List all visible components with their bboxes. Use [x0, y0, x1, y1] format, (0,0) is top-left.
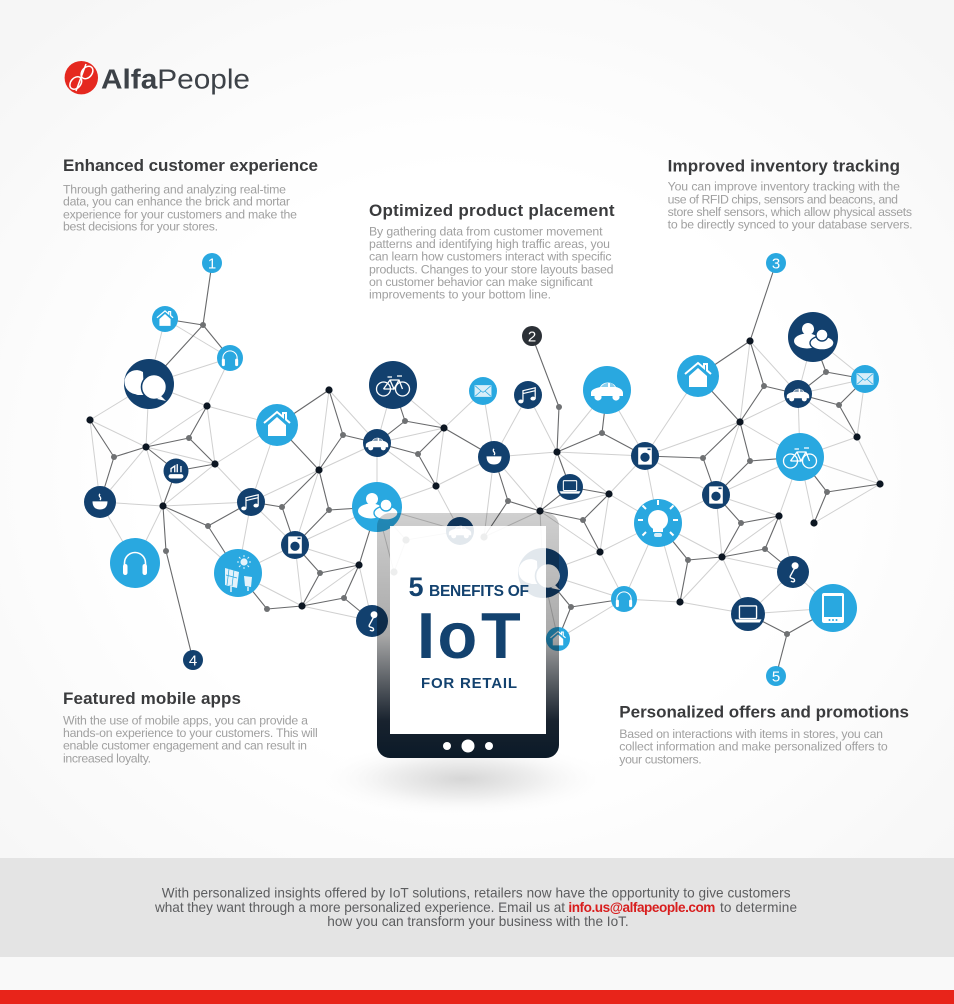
text block: Improved inventory tracking: You can improve inventory tracking with the [668, 180, 900, 194]
text block: Personalized offers and promotions: collect information and make personalized offers to [619, 740, 888, 754]
tablet device [377, 513, 559, 758]
logo: AlfaPeople: AlfaPeople [101, 63, 250, 94]
marker 4: 4 [189, 652, 197, 670]
icon: people left [352, 482, 402, 532]
icon: people dark [788, 312, 838, 362]
text block: Enhanced customer experience: best decisions for your stores. [63, 220, 218, 234]
icon: coffee left [84, 486, 116, 518]
text block: Personalized offers and promotions: Based on interactions with items in stores, you can [619, 727, 883, 741]
tablet title: 5 benefits of IoT for retail: BENEFITS OF [429, 583, 529, 600]
icon: chat bubbles [124, 359, 174, 409]
tablet frame [377, 513, 559, 758]
text block: Featured mobile apps [63, 689, 318, 765]
text block: Optimized product placement: improvements to your bottom line. [369, 288, 551, 302]
icon: factory chart [164, 458, 188, 484]
text block: Featured mobile apps: hands-on experience to your customers. This will [63, 726, 318, 740]
icon: laptop large [731, 597, 765, 631]
text block: Optimized product placement: By gathering data from customer movement [369, 224, 603, 238]
icon: music centre [514, 381, 542, 409]
marker 2 [522, 326, 542, 346]
network: dark connection lines [90, 263, 880, 676]
text block: Improved inventory tracking: use of RFID chips, sensors and beacons, and [668, 192, 898, 206]
marker 1 [202, 253, 222, 273]
icon: car large [583, 366, 631, 414]
icon: washer centre [631, 442, 659, 470]
icon: email right [851, 365, 879, 393]
closing band: to determine [720, 900, 797, 915]
icon: car small right [784, 380, 812, 408]
closing band: how you can transform your business with the IoT. [327, 914, 629, 929]
marker 2: 2 [528, 328, 536, 346]
marker 3: 3 [772, 256, 780, 272]
tablet title: 5 benefits of IoT for retail: FOR RETAIL [421, 675, 517, 692]
text block: Enhanced customer experience: Through gathering and analyzing real-time [63, 182, 286, 196]
icon: washer right [702, 481, 730, 509]
icon: solar panels [214, 549, 262, 597]
marker 5: 5 [772, 668, 780, 686]
tablet title: 5 benefits of IoT for retail [408, 572, 529, 692]
red footer bar [0, 990, 954, 1004]
tablet title: 5 benefits of IoT for retail: 5 [408, 572, 424, 602]
text block: Personalized offers and promotions: your customers. [619, 752, 702, 766]
icon: headphones large [110, 538, 160, 588]
marker 5 [766, 666, 786, 686]
icon: home large [256, 404, 298, 446]
icon: bicycle dark [369, 361, 417, 409]
text block: Improved inventory tracking: store shelf sensors, which allow physical assets [668, 205, 912, 219]
text block: Optimized product placement: products. Changes to your store layouts based [369, 262, 614, 276]
marker 4 [183, 650, 203, 670]
icon: microphone left [356, 605, 388, 637]
tablet screen [390, 526, 546, 734]
icon: email centre [469, 377, 497, 405]
tablet title: 5 benefits of IoT for retail: IoT [417, 599, 521, 672]
network: light connection lines [90, 319, 880, 639]
text block: Enhanced customer experience: Enhanced customer experience [63, 156, 318, 175]
network: junction nodes [86, 322, 884, 637]
icon: music left [237, 488, 265, 516]
marker 3 [766, 253, 786, 273]
text block: Featured mobile apps: enable customer engagement and can result in [63, 739, 307, 753]
closing band [0, 858, 954, 957]
icon: car small centre left [363, 429, 391, 457]
icon: laptop small [557, 474, 583, 500]
icon: home small tablet edge [546, 627, 570, 651]
text block: Improved inventory tracking [668, 156, 913, 232]
text block: Featured mobile apps: With the use of mobile apps, you can provide a [63, 713, 308, 727]
icon: bicycle light [776, 433, 824, 481]
text block: Enhanced customer experience [63, 156, 318, 234]
icon: coffee centre [478, 441, 510, 473]
icon: tablet [809, 584, 857, 632]
text block: Optimized product placement: patterns and identifying high traffic areas, you [369, 237, 610, 251]
icon: headphones small left [217, 345, 243, 371]
text block: Personalized offers and promotions: Personalized offers and promotions [619, 703, 909, 722]
text block: Improved inventory tracking: Improved inventory tracking [668, 156, 900, 176]
tablet ground shadow [313, 741, 613, 817]
text block: Optimized product placement: can learn how customers interact with specific [369, 250, 612, 264]
text block: Optimized product placement [369, 201, 615, 302]
icon: washer left [281, 531, 309, 559]
icon: light bulb [634, 499, 682, 547]
icon: home small left [152, 306, 178, 332]
icon: home right [677, 355, 719, 397]
text block: Improved inventory tracking: to be directly synced to your database servers. [668, 218, 913, 232]
tablet buttons [443, 740, 493, 752]
text block: Personalized offers and promotions [619, 703, 909, 766]
closing band: info.us@alfapeople.com [568, 900, 715, 915]
text block: Featured mobile apps: increased loyalty. [63, 751, 151, 765]
icon: hidden chat behind tablet [518, 548, 568, 598]
text block: Enhanced customer experience: experience for your customers and make the [63, 207, 297, 221]
icon: microphone right [777, 556, 809, 588]
icon: hidden car behind tablet [446, 517, 474, 545]
text block: Optimized product placement: on customer behavior can make significant [369, 275, 593, 289]
marker 1: 1 [208, 256, 216, 272]
icon: headphones centre [611, 586, 637, 612]
text block: Featured mobile apps: Featured mobile apps [63, 689, 241, 708]
closing band: With personalized insights offered by IoT solutions, retailers now have the opportunity to give customers [162, 886, 791, 900]
text block: Optimized product placement: Optimized product placement [369, 201, 615, 220]
closing band: what they want through a more personalized experience. Email us at [154, 900, 565, 915]
text block: Enhanced customer experience: data, you can enhance the brick and mortar [63, 195, 290, 209]
